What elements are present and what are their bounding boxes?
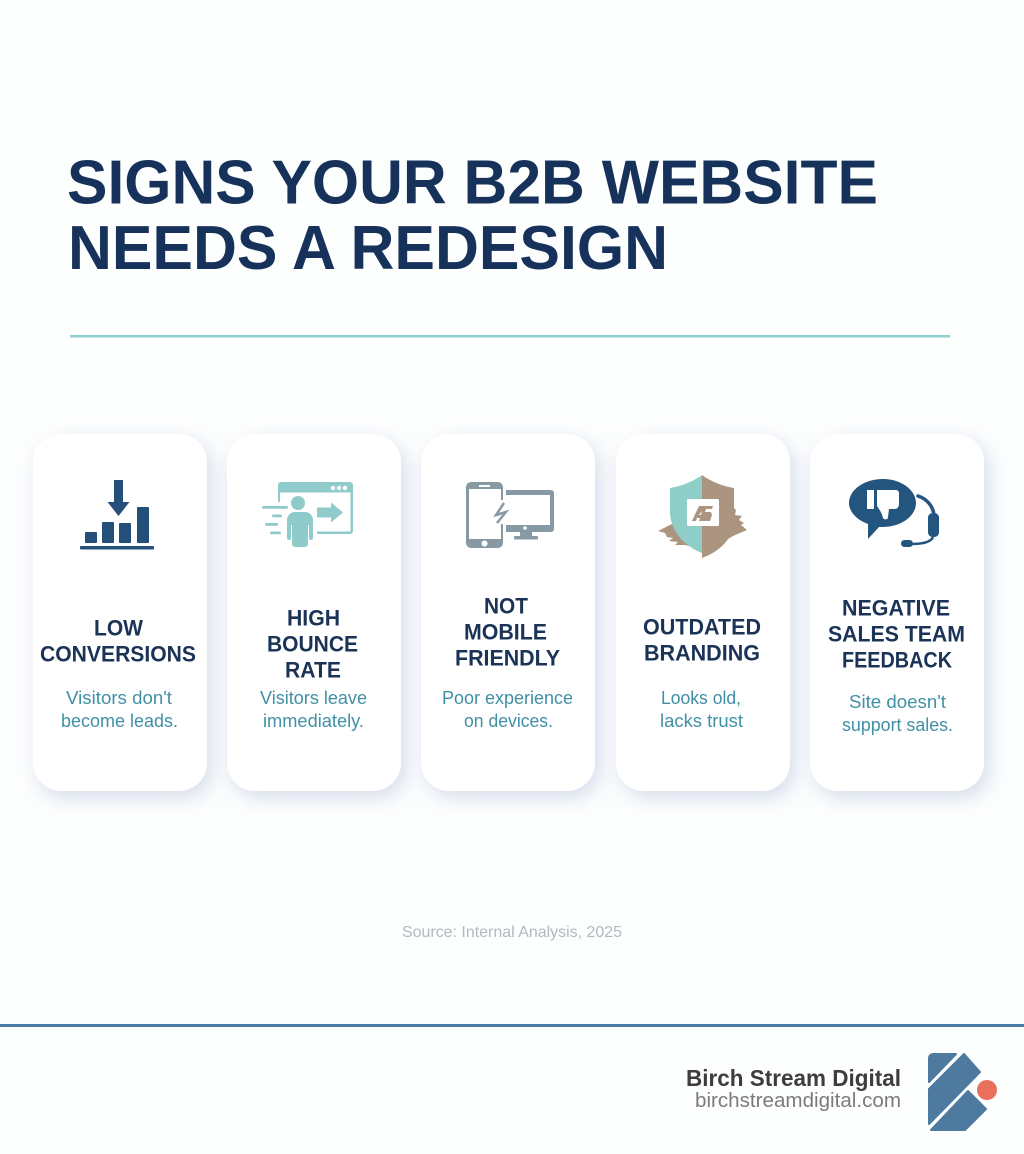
heading: high bounce rate: HIGH (287, 606, 340, 630)
description: low conversions (61, 687, 178, 731)
heading: low conversions: LOW (94, 616, 143, 640)
heading: negative sales team feedback: SALES TEAM (828, 622, 965, 646)
title: NEEDS A REDESIGN (68, 214, 668, 283)
icon: phone and monitor (466, 482, 554, 548)
heading: not mobile friendly: MOBILE (464, 620, 547, 644)
title (67, 148, 878, 283)
description: outdated branding (660, 687, 743, 731)
description: negative sales team feedback (842, 691, 953, 735)
description: high bounce rate: immediately. (263, 710, 364, 731)
icon: person leaving window (262, 482, 353, 547)
heading: high bounce rate (267, 606, 358, 682)
heading: outdated branding: BRANDING (644, 640, 760, 666)
heading: not mobile friendly: NOT (484, 594, 529, 618)
panel: negative sales team feedback (810, 434, 984, 791)
footer rule (0, 1024, 1024, 1027)
heading: not mobile friendly (455, 594, 560, 670)
icon: thumbs down headset (849, 479, 939, 547)
heading: negative sales team feedback (828, 596, 965, 672)
heading: negative sales team feedback: NEGATIVE (842, 596, 950, 620)
description: outdated branding: lacks trust (660, 710, 743, 731)
description: not mobile friendly: on devices. (464, 710, 553, 731)
description: outdated branding: Looks old, (661, 687, 741, 708)
heading: low conversions (40, 616, 196, 666)
title: SIGNS YOUR B2B WEBSITE (67, 148, 878, 218)
heading: outdated branding (643, 614, 761, 666)
heading: high bounce rate: BOUNCE (267, 632, 358, 656)
description: high bounce rate (260, 687, 367, 731)
logo (929, 1054, 997, 1130)
heading: low conversions: CONVERSIONS (40, 642, 196, 666)
panel: not mobile friendly (421, 434, 595, 791)
description: low conversions: become leads. (61, 710, 178, 731)
source note: Source: Internal Analysis, 2025 (402, 924, 622, 941)
heading: outdated branding: OUTDATED (643, 614, 761, 640)
panel: low conversions (33, 434, 207, 791)
panel: high bounce rate (227, 434, 401, 791)
footer brand name: Birch Stream Digital (686, 1065, 901, 1091)
icon: split shield (658, 475, 747, 558)
panel: outdated branding (616, 434, 790, 791)
description: low conversions: Visitors don't (66, 687, 172, 708)
description: not mobile friendly (442, 687, 573, 731)
footer url: birchstreamdigital.com (695, 1089, 901, 1112)
heading: negative sales team feedback: FEEDBACK (842, 648, 952, 672)
icon: falling bar chart (80, 480, 154, 550)
description: not mobile friendly: Poor experience (442, 687, 573, 708)
heading: not mobile friendly: FRIENDLY (455, 646, 560, 670)
description: negative sales team feedback: Site doesn't (849, 691, 946, 712)
description: negative sales team feedback: support sales. (842, 714, 953, 735)
heading: high bounce rate: RATE (285, 658, 341, 682)
description: high bounce rate: Visitors leave (260, 687, 367, 708)
